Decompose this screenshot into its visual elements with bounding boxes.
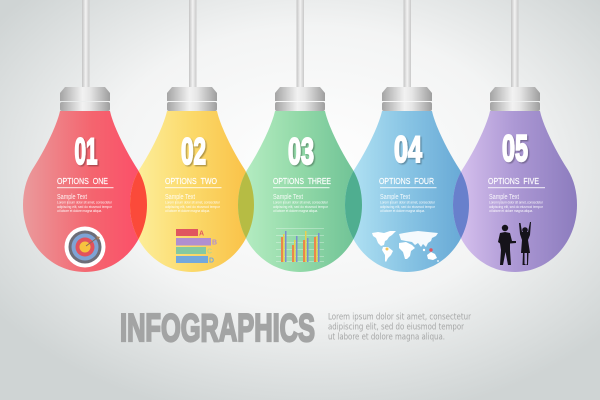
cord three bbox=[296, 0, 304, 88]
icon: bar list: B bbox=[212, 240, 217, 246]
bulb body four bbox=[345, 111, 469, 272]
icon: world map bbox=[372, 231, 439, 262]
description text bbox=[328, 312, 471, 342]
chart: column chart bbox=[276, 228, 324, 262]
number 02: 02 bbox=[181, 131, 206, 172]
text block one bbox=[57, 194, 113, 213]
cap four bbox=[382, 87, 432, 111]
text block three: Sample Text bbox=[273, 194, 303, 201]
text block two bbox=[165, 194, 221, 213]
text block four: ut labore et dolore magna aliqua. bbox=[380, 209, 425, 213]
heading: options two: OPTIONS TWO bbox=[165, 176, 217, 186]
title: INFOGRAPHICS bbox=[120, 307, 315, 350]
text block five: ut labore et dolore magna aliqua. bbox=[489, 209, 533, 213]
cap three bbox=[275, 87, 325, 111]
icon: bar list: A bbox=[199, 230, 204, 238]
bulb body five bbox=[453, 111, 577, 272]
cap one bbox=[60, 87, 110, 111]
cap five bbox=[490, 87, 540, 111]
text block four: Lorem ipsum dolor sit amet, consectetur bbox=[380, 200, 436, 204]
panel: bulb two bbox=[130, 0, 246, 272]
text block one: Sample Text bbox=[57, 194, 87, 201]
text block two: ut labore et dolore magna aliqua. bbox=[165, 209, 210, 213]
text block five: Lorem ipsum dolor sit amet, consectetur bbox=[489, 200, 544, 204]
text block one: Lorem ipsum dolor sit amet, consectetur bbox=[57, 200, 113, 204]
number 01: 01 bbox=[74, 131, 98, 172]
number 03: 03 bbox=[288, 131, 314, 172]
overlap yellow green bbox=[238, 172, 254, 238]
text block three: Lorem ipsum dolor sit amet, consectetur bbox=[273, 200, 329, 204]
icon: bar list bbox=[176, 229, 217, 264]
description text: adipiscing elit, sed do eiusmod tempor bbox=[328, 322, 464, 332]
bulb body three bbox=[238, 111, 362, 272]
icon: target bbox=[64, 226, 106, 268]
heading: options one: OPTIONS ONE bbox=[57, 176, 108, 186]
text block four: adipiscing elit, sed do eiusmod tempor bbox=[380, 205, 436, 209]
bulb body two bbox=[130, 111, 254, 272]
overlap green blue bbox=[345, 171, 362, 239]
text block three: ut labore et dolore magna aliqua. bbox=[273, 209, 318, 213]
cord four bbox=[404, 0, 411, 88]
panel: bulb three bbox=[238, 0, 354, 272]
cord two bbox=[189, 0, 196, 88]
overlap red yellow bbox=[130, 171, 147, 239]
text block five: Sample Text bbox=[489, 194, 519, 201]
text block two: Lorem ipsum dolor sit amet, consectetur bbox=[165, 200, 221, 204]
icon: bar list: C bbox=[207, 248, 212, 256]
description text: ut labore et dolore magna aliqua. bbox=[328, 332, 445, 342]
cord five bbox=[511, 0, 518, 88]
text block two: adipiscing elit, sed do eiusmod tempor bbox=[165, 205, 221, 209]
panel: bulb four bbox=[345, 0, 461, 272]
text block four: Sample Text bbox=[380, 194, 410, 201]
cord one bbox=[82, 0, 90, 88]
cap two bbox=[167, 87, 217, 111]
panel: bulb five bbox=[443, 0, 577, 272]
bulb body one bbox=[23, 111, 147, 272]
panel: bulb one bbox=[23, 0, 147, 272]
number 05: 05 bbox=[502, 128, 528, 169]
number 04: 04 bbox=[394, 129, 422, 170]
heading: options three: OPTIONS THREE bbox=[273, 176, 331, 186]
heading: options five: OPTIONS FIVE bbox=[488, 176, 539, 186]
text block two: Sample Text bbox=[165, 194, 195, 201]
text block three: adipiscing elit, sed do eiusmod tempor bbox=[273, 205, 329, 209]
text block four bbox=[380, 194, 436, 213]
text block five: adipiscing elit, sed do eiusmod tempor bbox=[489, 205, 544, 209]
heading: options four: OPTIONS FOUR bbox=[379, 176, 434, 186]
icon: business people bbox=[498, 222, 531, 265]
text block five bbox=[489, 194, 544, 213]
overlap blue purple bbox=[453, 172, 469, 238]
text block three bbox=[273, 194, 329, 213]
text block one: ut labore et dolore magna aliqua. bbox=[57, 209, 102, 213]
description text: Lorem ipsum dolor sit amet, consectetur bbox=[328, 312, 471, 322]
icon: bar list: D bbox=[209, 258, 214, 264]
text block one: adipiscing elit, sed do eiusmod tempor bbox=[57, 205, 113, 209]
